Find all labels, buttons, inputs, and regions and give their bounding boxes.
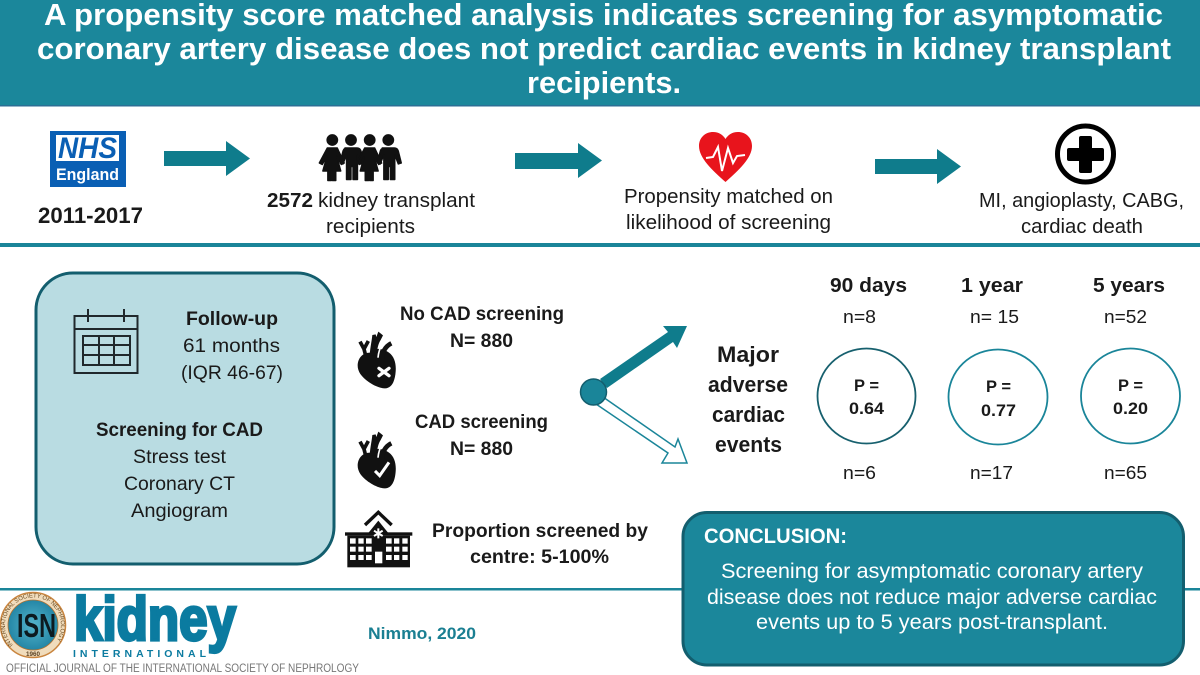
logo: International Society of Nephrology seal: INTERNATIONAL SOCIETY OF NEPHROLOGY	[0, 593, 66, 648]
text: proportion screened	[432, 520, 648, 568]
arrow: filled branch to upper outcome	[600, 326, 687, 388]
text: follow-up	[181, 308, 283, 384]
branch node	[580, 379, 606, 405]
column: 5 years: n=65	[1104, 463, 1147, 483]
column: 1 year: 1 year	[961, 274, 1023, 297]
column: 90 days: 0.64	[849, 400, 885, 418]
title banner: recipients.	[527, 65, 681, 100]
text: propensity matching: Propensity matched on	[624, 185, 833, 208]
panel: conclusion: CONCLUSION:	[704, 525, 847, 548]
text: citation: Nimmo, 2020	[368, 624, 476, 643]
text: follow-up: Follow-up	[186, 308, 278, 330]
icon: heart with check	[358, 432, 396, 488]
panel: conclusion: Screening for asymptomatic coronary artery	[721, 560, 1144, 583]
column: 1 year: n= 15	[970, 307, 1019, 327]
text: screening modalities: Stress test	[133, 446, 227, 468]
text: propensity matching: likelihood of screening	[626, 211, 831, 234]
text: cohort size: kidney transplant	[318, 189, 475, 212]
column: 90 days: P =	[854, 377, 879, 395]
icon: NHS England logo: NHS	[58, 132, 117, 165]
text: cohort size: 2572	[267, 189, 313, 212]
text: CAD screening: CAD screening	[415, 411, 548, 433]
text: no CAD screening	[400, 303, 564, 352]
panel: conclusion	[683, 512, 1184, 665]
column: 5 years: 0.20	[1113, 400, 1148, 418]
text: propensity matching	[624, 185, 833, 234]
text: CAD screening	[415, 411, 548, 460]
date range: 2011-2017	[38, 203, 143, 228]
icon: group of people	[319, 135, 401, 180]
column: 5 years	[1081, 274, 1180, 483]
logo: International Society of Nephrology seal: 1960	[26, 651, 40, 658]
text: journal tagline: OFFICIAL JOURNAL OF THE INTERNATIONAL SOCIETY OF NEPHROLOGY	[6, 663, 359, 675]
logo: International Society of Nephrology seal: ISN	[17, 607, 56, 644]
panel: follow-up and screening	[36, 273, 334, 564]
text: major adverse cardiac events: events	[715, 432, 782, 457]
arrow: step 1 to 2	[164, 141, 250, 176]
arrow: step 3 to 4	[875, 149, 961, 184]
text: cohort size	[267, 189, 475, 238]
text: outcomes	[979, 189, 1184, 238]
logo: Kidney International wordmark: kidney	[74, 585, 236, 653]
icon: red heart with ECG	[699, 132, 752, 182]
text: follow-up: 61 months	[183, 335, 280, 357]
text: major adverse cardiac events: cardiac	[712, 402, 785, 427]
text: screening modalities	[96, 419, 263, 522]
text: screening modalities: Screening for CAD	[96, 419, 263, 441]
text: cohort size: recipients	[326, 215, 415, 238]
column: 90 days	[818, 274, 916, 483]
text: CAD screening: N= 880	[450, 438, 513, 460]
column: 90 days: n=8	[843, 307, 876, 327]
text: no CAD screening: N= 880	[450, 330, 513, 352]
text: no CAD screening: No CAD screening	[400, 303, 564, 325]
icon: heart with cross	[358, 332, 396, 388]
text: screening modalities: Angiogram	[131, 500, 228, 522]
title banner	[0, 0, 1200, 106]
text: outcomes: cardiac death	[1021, 215, 1143, 238]
icon: calendar	[74, 309, 138, 373]
text: screening modalities: Coronary CT	[124, 473, 235, 495]
column: 5 years: P =	[1118, 377, 1143, 395]
icon: NHS England logo	[50, 131, 126, 187]
arrow: step 2 to 3	[515, 143, 602, 178]
column: 1 year: n=17	[970, 463, 1013, 483]
icon: medical cross in circle	[1058, 126, 1114, 182]
column: 5 years: n=52	[1104, 307, 1147, 327]
text: major adverse cardiac events: adverse	[708, 372, 788, 397]
text: major adverse cardiac events: Major	[717, 342, 779, 367]
text: proportion screened: Proportion screened by	[432, 520, 648, 542]
logo: Kidney International wordmark: INTERNATIONAL	[73, 648, 207, 660]
title banner: coronary artery disease does not predict cardiac events in kidney transplant	[37, 31, 1171, 66]
text: outcomes: MI, angioplasty, CABG,	[979, 189, 1184, 212]
column: 90 days: n=6	[843, 463, 876, 483]
panel: conclusion: disease does not reduce major adverse cardiac	[707, 586, 1157, 609]
text: proportion screened: centre: 5-100%	[470, 546, 609, 568]
column: 90 days: 90 days	[830, 274, 907, 297]
column: 5 years: 5 years	[1093, 274, 1165, 297]
panel: conclusion: events up to 5 years post-transplant.	[756, 611, 1108, 634]
column: 1 year	[948, 274, 1048, 483]
icon: hospital	[345, 512, 412, 567]
text: major adverse cardiac events	[708, 342, 788, 457]
column: 1 year: P =	[986, 378, 1011, 396]
icon: NHS England logo: England	[56, 165, 119, 184]
arrow: outlined branch to lower outcome	[596, 397, 687, 463]
column: 1 year: 0.77	[981, 402, 1016, 420]
text: follow-up: (IQR 46-67)	[181, 362, 283, 384]
